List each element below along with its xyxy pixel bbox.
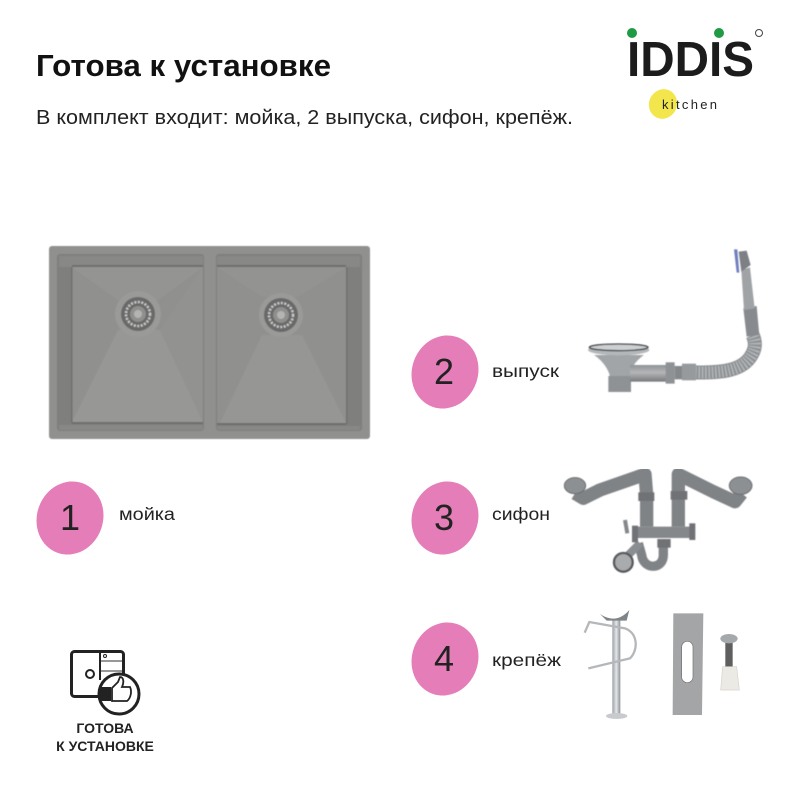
fasteners photo	[585, 610, 739, 719]
drain outlet photo	[588, 249, 759, 392]
label: мойка: мойка	[119, 504, 175, 524]
badge 3: 3	[434, 497, 454, 538]
siphon photo	[564, 474, 752, 572]
badge 4: 4	[434, 638, 454, 679]
right drain	[259, 293, 303, 337]
clamp bolt	[585, 610, 636, 719]
badge 2: 2	[434, 351, 454, 392]
label: сифон: сифон	[492, 504, 550, 524]
title: Готова к установке	[36, 48, 331, 83]
logo: IDDIS kitchen: kitchen	[662, 97, 719, 112]
logo: IDDIS kitchen: IDDIS	[627, 33, 754, 87]
logo: IDDIS kitchen	[627, 28, 762, 124]
subtitle: contents of the kit: В комплект входит: мойка, 2 выпуска, сифон, крепёж.	[36, 106, 573, 129]
badge 3	[401, 472, 489, 564]
screw with plug	[720, 634, 739, 690]
label: крепёж: крепёж	[492, 650, 561, 670]
left drain	[115, 291, 161, 337]
icon caption	[56, 720, 154, 754]
badge 1: 1	[60, 497, 80, 538]
left bowl	[57, 254, 204, 431]
icon: ready to install	[72, 652, 139, 714]
icon caption: К УСТАНОВКЕ	[56, 738, 154, 754]
label: выпуск: выпуск	[492, 361, 559, 381]
badge 1	[26, 472, 114, 564]
sink photo	[49, 246, 370, 439]
badge 4	[401, 613, 489, 705]
badge 2	[401, 326, 489, 418]
right bowl	[216, 254, 362, 431]
slotted plate	[673, 613, 703, 715]
icon caption: ГОТОВА	[76, 720, 134, 736]
